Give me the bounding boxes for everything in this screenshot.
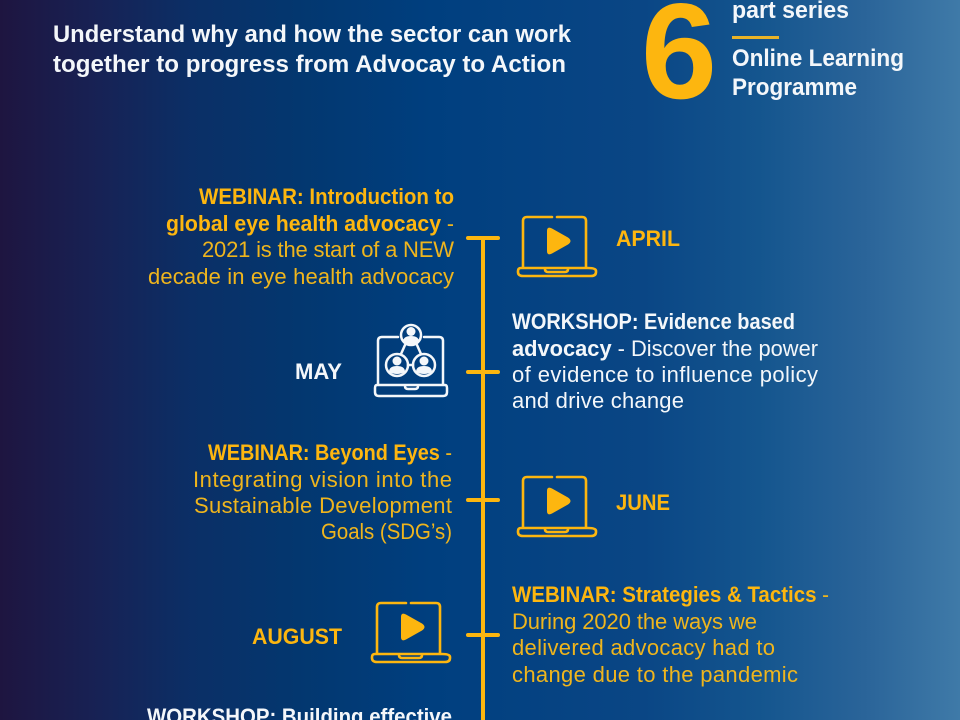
event: June webinar text: Goals (SDG’s)	[321, 519, 452, 544]
series label	[732, 0, 904, 101]
event: May workshop text: and drive change	[512, 388, 684, 413]
icon: laptop network May	[375, 325, 447, 396]
series label: Online Learning	[732, 45, 904, 72]
event: June webinar text: Integrating vision into the	[193, 467, 452, 492]
event: June webinar text: WEBINAR: Beyond Eyes -	[208, 440, 452, 465]
event: August webinar text	[512, 582, 829, 687]
event: May workshop text: advocacy - Discover the power	[512, 336, 818, 361]
event: August webinar text: delivered advocacy had to	[512, 635, 775, 660]
event: May workshop text: of evidence to influence policy	[512, 362, 818, 387]
icon: laptop play August	[372, 603, 450, 662]
month: May: MAY	[295, 359, 342, 384]
event: May workshop text	[512, 309, 818, 413]
event: April webinar text: global eye health advocacy -	[166, 211, 454, 236]
month: April: APRIL	[616, 226, 680, 251]
event: April webinar text: decade in eye health advocacy	[148, 264, 454, 289]
intro heading: together to progress from Advocay to Action	[53, 51, 566, 78]
event: August webinar text: change due to the pandemic	[512, 662, 798, 687]
event: April webinar text: 2021 is the start of a NEW	[202, 237, 454, 262]
series label: Programme	[732, 74, 857, 101]
month: June: JUNE	[616, 490, 670, 515]
event: August webinar text: During 2020 the ways we	[512, 609, 757, 634]
intro heading: Understand why and how the sector can work	[53, 21, 572, 48]
intro heading	[53, 21, 572, 78]
event: May workshop text: WORKSHOP: Evidence based	[512, 309, 795, 334]
event: August webinar text: WEBINAR: Strategies & Tactics -	[512, 582, 829, 607]
event: June webinar text	[193, 440, 452, 544]
month: August: AUGUST	[252, 624, 342, 649]
icon: laptop play June	[518, 477, 596, 536]
event: April webinar text	[148, 184, 454, 289]
event: April webinar text: WEBINAR: Introduction to	[199, 184, 454, 209]
icon: laptop play April	[518, 217, 596, 276]
event: June webinar text: Sustainable Development	[194, 493, 452, 518]
timeline axis	[468, 238, 498, 720]
